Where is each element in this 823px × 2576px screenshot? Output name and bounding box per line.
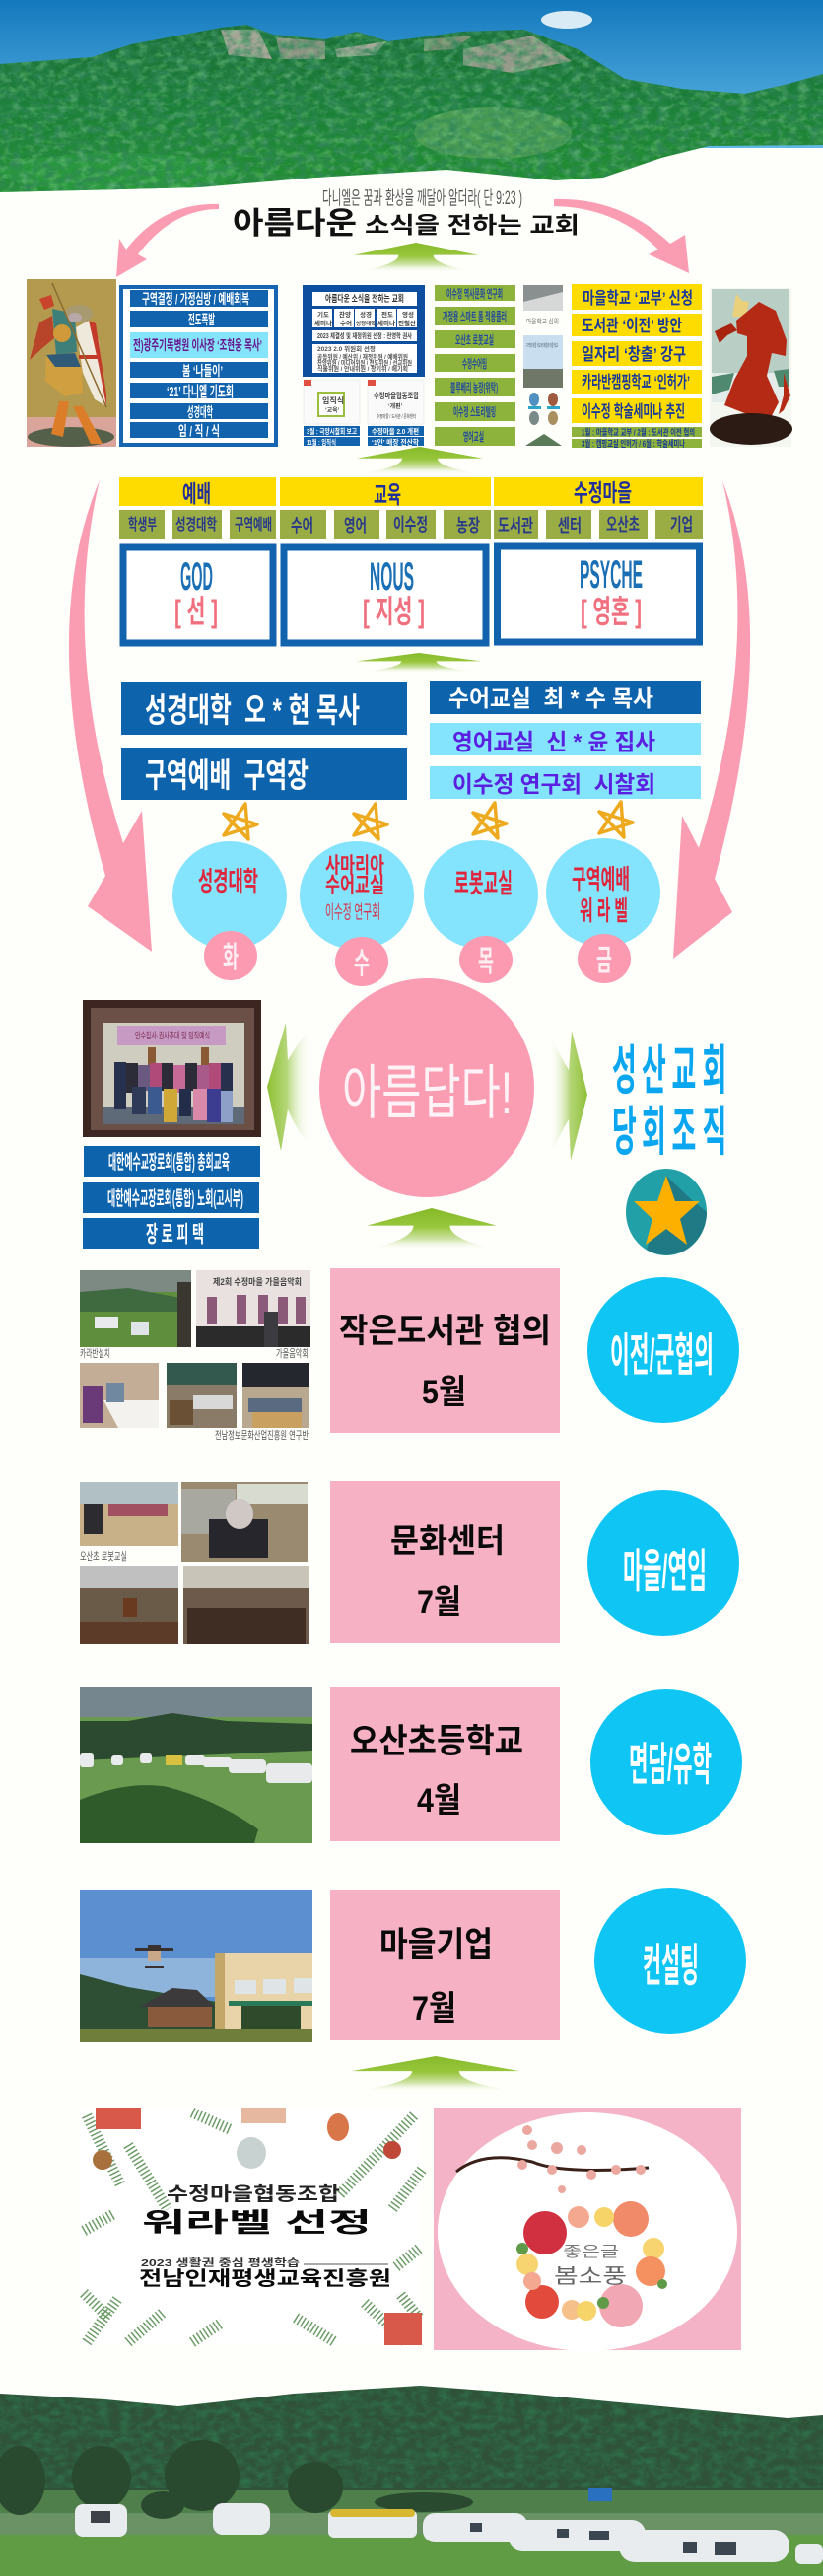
goal: 이수정 학술세미나 추진 xyxy=(582,402,685,421)
bottom photo: mountain and caravans xyxy=(0,2367,823,2576)
box: GOD xyxy=(123,547,273,643)
icon: gold star 1 xyxy=(224,804,257,839)
circle: Tuesday bible college: 화 xyxy=(223,942,239,974)
arrow: green pointing right xyxy=(549,1031,587,1161)
schedule xyxy=(572,438,702,449)
card: cooperative revision: ‘1인’ 매장 전산학 xyxy=(372,437,419,447)
blossom branch xyxy=(456,2125,649,2193)
circle: village term xyxy=(587,1490,739,1636)
bar: english class xyxy=(430,723,701,755)
schedule: 3월 : 캠핑교실 인허가 / 6월 : 학술세미나 xyxy=(582,438,685,449)
box: PSYCHE: PSYCHE xyxy=(580,553,643,597)
arrow: pink curve to the right xyxy=(554,199,689,273)
tag: 구역예배 xyxy=(235,516,272,534)
heading: church session organisation xyxy=(612,1041,726,1163)
arrow: green up 5 xyxy=(352,2056,519,2092)
card: work-life balance selection: 워라벨 선정 xyxy=(142,2208,372,2238)
box: GOD: [ 선 ] xyxy=(174,594,218,629)
box: NOUS: [ 지성 ] xyxy=(363,594,425,629)
icon: red dragon painting xyxy=(710,288,792,447)
schedule: 1월 : 마을학교 교부 / 2월 : 도서관 이전 협의 xyxy=(582,426,695,438)
panel: center blue plan sheet: 2023 제결성 및 재정위원 선정 : 전영학 권사 xyxy=(317,331,412,340)
photo group: row 1 activities: 전남정보문화산업진흥원 연구반 xyxy=(215,1428,309,1442)
tag: 이수정 xyxy=(393,515,428,535)
bar: bible college xyxy=(121,682,407,735)
card: ordination service xyxy=(304,380,360,447)
circle: Wednesday sign language: 수 xyxy=(354,948,370,980)
tag: 학생부 xyxy=(128,516,157,534)
panel: narrow village school images: 마을학교 심의 xyxy=(526,317,559,325)
bar: district worship: 구역예배 구역장 xyxy=(145,757,309,795)
row: 전도폭발 xyxy=(188,312,215,327)
committee text xyxy=(317,344,412,373)
goal: 일자리 ‘창출’ 강구 xyxy=(582,345,686,364)
panel: left blue schedule list xyxy=(121,287,276,445)
circle: Tuesday bible college: 성경대학 xyxy=(198,867,258,896)
goal: 도서관 ‘이전’ 방안 xyxy=(582,317,682,335)
block: village enterprise xyxy=(330,1890,560,2040)
tag: 기업 xyxy=(670,515,693,535)
photo group: row 1 activities: 가을음악회 xyxy=(276,1347,309,1360)
item xyxy=(435,378,515,396)
block: culture center: 문화센터 xyxy=(390,1523,505,1560)
heading: church session organisation: 당회조직 xyxy=(612,1103,726,1163)
circle: Wednesday sign language xyxy=(300,841,414,986)
card: spring outing wreath: 좋은글 xyxy=(563,2244,619,2260)
cell captions: 전도 xyxy=(381,310,393,319)
cell captions: 전철산 xyxy=(398,319,416,327)
arrow: green up 3 xyxy=(357,653,481,673)
circle: Wednesday sign language: 사마리아 xyxy=(325,853,384,878)
panel: village column xyxy=(494,477,703,642)
row xyxy=(130,403,268,420)
committee text: 2023 2.0 위원회 선정 xyxy=(317,344,376,353)
block: small library: 5월 xyxy=(422,1374,466,1411)
circle: consulting: 컨설팅 xyxy=(643,1940,699,1991)
arrow: green up 1 xyxy=(354,243,478,272)
bar: bible college: 성경대학 오 * 현 목사 xyxy=(145,692,360,730)
item xyxy=(435,402,515,421)
tag: 도서관 xyxy=(498,516,533,536)
panel: green program column xyxy=(435,285,515,446)
row: 성경대학 xyxy=(187,404,213,420)
main title: 아름다운 xyxy=(233,206,357,241)
box: PSYCHE: [ 영혼 ] xyxy=(581,594,642,629)
photo: caravan field xyxy=(80,1687,312,1843)
row xyxy=(130,362,268,379)
icon: gold star 3 xyxy=(473,803,507,838)
block: small library: 작은도서관 협의 xyxy=(339,1313,551,1350)
tag xyxy=(280,510,326,539)
bar: general assembly education: 대한예수교장로회(통합) 총회교육 xyxy=(108,1151,230,1174)
circle: consulting xyxy=(594,1888,746,2034)
heading xyxy=(280,477,491,509)
card: cooperative revision: ‘개편’ xyxy=(388,402,403,410)
tag xyxy=(386,510,436,539)
heading xyxy=(119,477,276,508)
item xyxy=(435,330,515,348)
circle: Friday district worship: 구역예배 xyxy=(572,865,630,894)
block: small library xyxy=(330,1268,560,1433)
circle: Wednesday sign language: 수어교실 xyxy=(325,873,384,897)
cell captions: 기도 xyxy=(317,310,329,319)
tag: 농장 xyxy=(456,516,480,536)
heading: 예배 xyxy=(182,481,211,508)
bar: general assembly education xyxy=(84,1146,260,1177)
icon: gold star 4 xyxy=(599,802,633,837)
decoration: corner greenery and ornaments xyxy=(84,2112,422,2342)
group of people xyxy=(114,1062,233,1122)
circle: Friday district worship xyxy=(546,838,660,983)
cell captions: 성경 xyxy=(360,310,372,319)
icon: star badge xyxy=(626,1169,707,1255)
panel: worship column xyxy=(119,477,276,643)
cell captions: 세미나 xyxy=(314,319,332,327)
block: elementary school xyxy=(330,1687,560,1841)
bar: elder election: 장 로 피 택 xyxy=(146,1221,204,1247)
heading: 교육 xyxy=(374,482,401,509)
row: ‘21’ 다니엘 기도회 xyxy=(167,384,234,400)
item xyxy=(435,285,515,301)
panel: yellow village goals xyxy=(572,284,702,449)
card: ordination service: 임직식 xyxy=(322,395,344,405)
cell captions: 세미나 xyxy=(377,319,395,327)
item: 가정용 스마트 폼 적용플러 xyxy=(443,309,507,323)
block: culture center: 7월 xyxy=(417,1584,461,1621)
item: 이수정 스토리텔링 xyxy=(453,405,496,419)
arrow: green pointing left xyxy=(267,1023,310,1151)
tag: 센터 xyxy=(558,516,582,536)
tag xyxy=(655,510,703,539)
row: 봄 ‘나들이’ xyxy=(182,363,223,379)
flower wreath xyxy=(516,2201,667,2327)
box: NOUS: NOUS xyxy=(370,555,414,599)
bar: research group: 이수정 연구회 시찰회 xyxy=(452,771,655,797)
heading xyxy=(494,477,703,507)
card: cooperative revision: 수정마을협동조합 xyxy=(374,391,419,400)
card: cooperative revision: 수정마을 / 도서관 / 문화센터 xyxy=(377,413,416,420)
box: NOUS xyxy=(284,547,486,643)
block: elementary school: 4월 xyxy=(417,1782,461,1820)
row xyxy=(130,290,268,307)
five small cells xyxy=(312,309,417,327)
tag xyxy=(172,510,222,539)
item: 오산초 로봇교실 xyxy=(455,333,494,347)
circle: interview and study xyxy=(590,1689,742,1835)
tag xyxy=(494,510,538,539)
heading: 수정마을 xyxy=(574,480,632,507)
tag: 오산초 xyxy=(606,515,640,535)
circle: Friday district worship: 금 xyxy=(596,945,612,977)
goal: 마을학교 ‘교부’ 신청 xyxy=(583,289,693,308)
cell captions: 성경대학 xyxy=(356,320,376,327)
circle: village term: 마을/연임 xyxy=(623,1545,707,1597)
photo group: row 2 activities xyxy=(80,1482,309,1644)
card: spring outing wreath: 봄소풍 xyxy=(554,2265,627,2288)
card: work-life balance selection xyxy=(80,2108,422,2345)
bar: elder election xyxy=(83,1218,259,1249)
caravans xyxy=(75,2503,823,2564)
circle: Tuesday bible college xyxy=(172,841,287,980)
photo group: row 2 activities: 오산초 로봇교실 xyxy=(80,1550,127,1563)
tag xyxy=(334,510,379,539)
goal xyxy=(572,341,702,366)
panel: narrow village school images xyxy=(523,285,563,446)
verse line: 다니엘은 꿈과 환상을 깨달아 알더라( 단 9:23 ) xyxy=(322,187,522,209)
tag: 영어 xyxy=(344,516,367,536)
item: 블루베리 농장(위탁) xyxy=(450,381,498,394)
circle: Wednesday sign language: 이수정 연구회 xyxy=(325,901,380,923)
icon: archangel painting xyxy=(27,279,116,447)
card: work-life balance selection: 전남인재평생교육진흥원 xyxy=(139,2267,391,2290)
bar: english class: 영어교실 신 * 윤 집사 xyxy=(452,729,655,754)
box: PSYCHE xyxy=(497,546,700,642)
cell captions: 찬양 xyxy=(339,310,351,319)
big pink circle: beautiful xyxy=(319,978,534,1197)
panel: center blue plan sheet: 아름다운 소식을 전하는 교회 xyxy=(325,293,404,305)
committee text: 공동위원 / 예산위 / 재정위원 / 예배위원 xyxy=(317,352,408,361)
photo group: row 1 activities: 카라반설치 xyxy=(80,1347,110,1360)
row xyxy=(130,422,268,439)
photo: framed group portrait: 안수집사·권사추대 및 임직예식 xyxy=(135,1030,210,1040)
item: 이수정 역사문화 연구회 xyxy=(446,286,503,301)
row xyxy=(130,311,268,327)
box: GOD: GOD xyxy=(180,555,213,599)
item xyxy=(435,427,515,446)
schedule xyxy=(572,426,702,438)
card: ordination service: 11월 : 임직식 xyxy=(307,437,336,447)
infographic canvas: 대한예수교장로회(통합) 노회(고시부) xyxy=(107,1187,243,1210)
goal xyxy=(572,370,702,394)
goal xyxy=(572,398,702,423)
row: highlighted speaker: 전)광주기독병원 이사장 ‘조현웅 목사’ xyxy=(133,337,262,353)
photo: framed group portrait xyxy=(83,1000,261,1137)
circle: Friday district worship: 워 라 벨 xyxy=(580,896,628,926)
card: spring outing wreath xyxy=(434,2108,741,2351)
circle: relocation talks xyxy=(587,1277,739,1423)
committee text: 식물위원 / 안내위원 / 장기위 / 에기획 xyxy=(317,364,408,373)
bar: presbytery exam xyxy=(83,1182,259,1213)
road sign xyxy=(588,2488,612,2501)
photo group: row 1 activities: 제2회 수정마을 가을음악회 xyxy=(213,1276,302,1287)
row: 임 / 직 / 식 xyxy=(178,423,220,439)
heading: church session organisation: 성산교회 xyxy=(612,1041,726,1102)
tag xyxy=(444,510,491,539)
block: village enterprise: 7월 xyxy=(412,1990,456,2028)
bar: research group xyxy=(430,766,701,799)
tag xyxy=(230,510,276,539)
tag: 수어 xyxy=(291,516,313,536)
panel: education column xyxy=(280,477,491,643)
arrow: green up 2 xyxy=(357,447,483,474)
tag: 성경대학 xyxy=(175,516,217,534)
icon: gold star 2 xyxy=(354,804,387,839)
trees xyxy=(0,2440,473,2519)
bar: sign language class xyxy=(430,681,701,714)
block: village enterprise: 마을기업 xyxy=(379,1926,493,1964)
row: 구역결정 / 가정심방 / 예배회복 xyxy=(142,291,249,307)
card: work-life balance selection: 2023 생활권 중심 평생학습 xyxy=(141,2256,300,2269)
card: ordination service: ‘교육’ xyxy=(325,407,340,414)
item xyxy=(435,354,515,372)
card: work-life balance selection: 수정마을협동조합 xyxy=(167,2183,340,2205)
bar: district worship xyxy=(121,748,407,800)
portraits xyxy=(525,393,562,446)
circle: interview and study: 면담/유학 xyxy=(629,1739,712,1790)
arrow: pink long down right xyxy=(673,481,750,959)
card: ordination service: 3월 : 극양시찰회 보고 xyxy=(307,426,357,436)
top photo: green mountain under a blue sky xyxy=(0,0,823,197)
photo: drone over school xyxy=(80,1890,312,2042)
row xyxy=(130,383,268,400)
block: elementary school: 오산초등학교 xyxy=(350,1723,523,1760)
arrow: pink long down left xyxy=(69,480,152,952)
panel: center blue plan sheet xyxy=(303,285,425,377)
item: 수정수어팀 xyxy=(462,357,487,371)
item xyxy=(435,307,515,325)
main title: 소식을 전하는 교회 xyxy=(365,212,580,238)
circle: Thursday robot class: 로봇교실 xyxy=(454,869,513,898)
photo group: row 1 activities xyxy=(80,1270,310,1442)
circle: Thursday robot class xyxy=(424,840,538,983)
cell captions xyxy=(314,310,416,327)
tag xyxy=(546,510,591,539)
cell captions: 수어 xyxy=(340,319,352,327)
committee text: 찬양위원 / 미디어위원 / 전도위원 / 선교위원 xyxy=(317,358,412,367)
infographic canvas: 구역의 마을 학교와 마을의 마을 학교 xyxy=(526,342,558,349)
tag xyxy=(599,510,648,539)
card: cooperative revision xyxy=(368,380,424,447)
card: cooperative revision: 수정마을 2.0 개편 xyxy=(372,426,419,436)
tag xyxy=(119,510,165,539)
goal: 카라반캠핑학교 ‘인허가’ xyxy=(582,373,690,392)
main title xyxy=(233,206,580,241)
goal xyxy=(572,284,702,310)
cell captions: 영성 xyxy=(402,310,414,319)
arrow: green up 4 xyxy=(367,1208,497,1250)
big pink circle: beautiful: 아름답다! xyxy=(342,1060,513,1126)
item: 영어교실 xyxy=(463,430,484,444)
circle: Thursday robot class: 목 xyxy=(478,946,494,978)
arrow: pink curve to the left xyxy=(116,204,219,277)
row: highlighted speaker xyxy=(130,332,268,358)
block: culture center xyxy=(330,1481,560,1643)
bar: sign language class: 수어교실 최 * 수 목사 xyxy=(448,685,653,711)
